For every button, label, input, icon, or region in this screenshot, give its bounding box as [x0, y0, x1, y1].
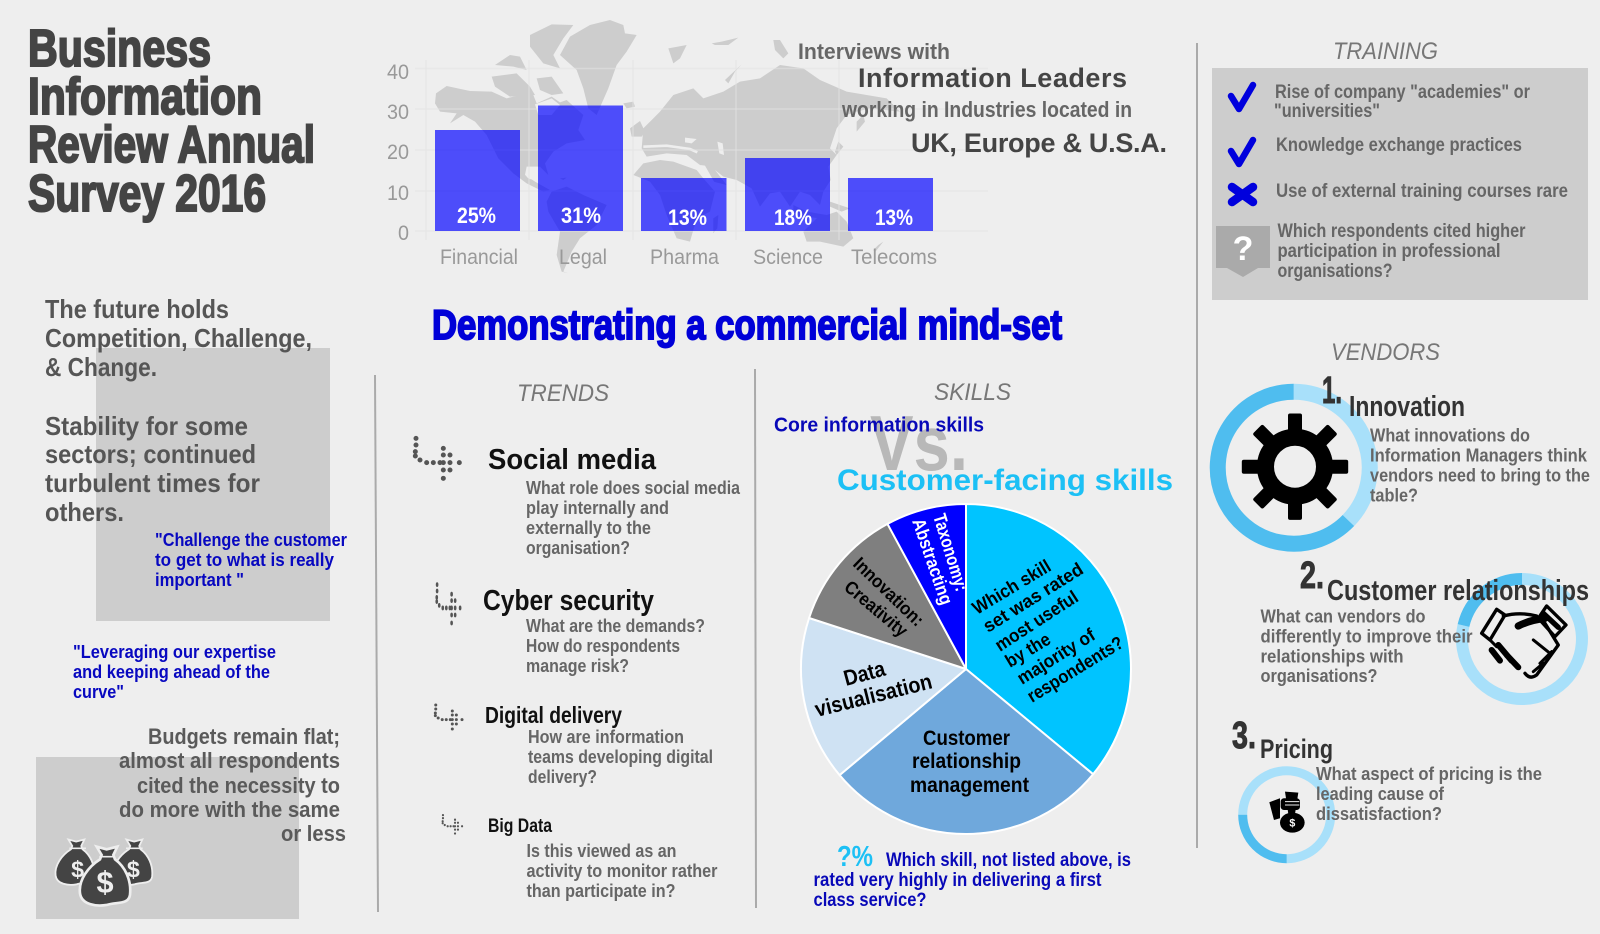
icon: hand with money bag: $	[1289, 818, 1295, 830]
skills question: rated very highly in delivering a first	[814, 870, 1102, 891]
bar values: 25%	[457, 203, 496, 228]
left intro text: others.	[45, 497, 124, 527]
vendor 3: pricing: dissatisfaction?	[1316, 803, 1442, 824]
vendor 1: innovation: 1.	[1322, 370, 1342, 412]
main heading: Demonstrating a commercial mind-set	[432, 301, 1062, 348]
left intro text	[45, 294, 312, 527]
trend: cyber security: Cyber security	[483, 585, 654, 617]
trend: big data: Big Data	[488, 816, 552, 837]
vs watermark: Vs.	[870, 399, 968, 487]
pie label: customer relationship management: relationship	[912, 750, 1021, 773]
training item 1: "universities"	[1274, 101, 1380, 122]
quote: challenge the customer: to get to what is really	[155, 549, 335, 570]
interviews text: Interviews with	[798, 39, 950, 64]
trend: social media: play internally and	[526, 497, 669, 518]
vendor 3: pricing	[1232, 715, 1542, 859]
training item 2: Knowledge exchange practices	[1276, 135, 1522, 156]
world map background	[435, 20, 900, 273]
trend: social media: What role does social media	[526, 477, 741, 498]
quote: challenge the customer	[155, 529, 347, 590]
icon: question bubble: ?	[1233, 230, 1253, 268]
y axis labels: 0	[398, 222, 409, 245]
pie label: innovation: Creativity	[840, 576, 913, 641]
quote: leveraging our expertise	[73, 641, 276, 702]
category labels: Science	[753, 246, 823, 269]
title: Survey 2016	[28, 165, 266, 223]
icon: handshake	[1482, 606, 1566, 677]
trend: cyber security	[437, 585, 705, 676]
vendors heading: VENDORS	[1331, 339, 1440, 366]
trend: social media: organisation?	[526, 537, 630, 558]
y axis labels: 20	[387, 141, 409, 164]
left intro text: & Change.	[45, 352, 157, 382]
icon: hand with money bag	[1269, 792, 1305, 833]
training question: organisations?	[1278, 261, 1392, 282]
category labels: Financial	[440, 246, 518, 269]
vendor 1: innovation	[1218, 370, 1590, 544]
pie label: innovation: Innovation:	[849, 553, 929, 630]
pie question label: by the	[1001, 628, 1054, 671]
skills question: class service?	[814, 890, 926, 911]
trend: social media: externally to the	[526, 517, 651, 538]
icon: dotted arrow small	[437, 585, 460, 623]
budgets text: or less	[281, 821, 346, 846]
y axis labels: 10	[387, 182, 409, 205]
icon: check second	[1231, 140, 1253, 164]
skills question: Which skill, not listed above, is	[886, 850, 1131, 871]
category labels	[440, 246, 937, 269]
trend: big data: Is this viewed as an	[526, 840, 676, 861]
vendor 2: customer relationships: 2.	[1300, 555, 1324, 597]
trend: digital delivery: Digital delivery	[485, 702, 622, 728]
pie label: data visualisation: Data	[841, 656, 889, 691]
vendor 2: customer relationships: differently to improve their	[1260, 626, 1472, 646]
icon: dotted arrow smaller	[435, 705, 462, 729]
left intro text: The future holds	[45, 294, 229, 324]
panel: training	[1212, 68, 1588, 300]
vendor 2: customer relationships: organisations?	[1260, 665, 1378, 686]
pie label: taxonomy: Abstracting	[908, 515, 957, 607]
vendor 1: innovation: table?	[1370, 484, 1418, 506]
budgets text: Budgets remain flat;	[148, 724, 340, 749]
icon: money bags	[55, 840, 152, 906]
budgets text: cited the necessity to	[137, 773, 340, 798]
quote: leveraging our expertise: curve"	[73, 681, 124, 702]
left intro text: turbulent times for	[45, 468, 260, 498]
training question: Which respondents cited higher	[1278, 221, 1526, 242]
training heading: TRAINING	[1333, 38, 1438, 65]
quote: leveraging our expertise: "Leveraging our expertise	[73, 641, 276, 662]
pie label: customer relationship management: Customer	[923, 727, 1010, 750]
skills heading: SKILLS	[934, 379, 1011, 406]
ring gauge	[1218, 392, 1370, 544]
y axis labels: 30	[387, 101, 409, 124]
left grey panel	[96, 348, 330, 621]
training question	[1278, 221, 1526, 282]
budget grey panel	[36, 757, 299, 919]
vendor 3: pricing: What aspect of pricing is the	[1316, 763, 1542, 784]
category labels: Pharma	[650, 246, 719, 269]
icon: question bubble	[1216, 226, 1270, 277]
pie question label: majority of	[1013, 624, 1099, 688]
pie question label: set was rated	[979, 558, 1087, 636]
icon: check	[1231, 85, 1253, 109]
vendor 1: innovation: Innovation	[1349, 391, 1465, 423]
quote: challenge the customer: "Challenge the customer	[155, 529, 347, 550]
pie label: customer relationship management	[910, 727, 1029, 797]
training item 3: Use of external training courses rare	[1276, 181, 1568, 202]
category labels: Telecoms	[851, 246, 937, 269]
title	[28, 20, 315, 223]
category labels: Legal	[559, 246, 607, 269]
training item 1	[1274, 82, 1531, 122]
pie label: taxonomy: Taxonomy:	[929, 511, 973, 594]
pie question label	[968, 555, 1127, 706]
skills question	[814, 841, 1131, 911]
left intro text: sectors; continued	[45, 439, 256, 469]
training item 1: Rise of company "academies" or	[1275, 82, 1531, 103]
vendor 1: innovation: What innovations do	[1370, 424, 1530, 446]
ring gauge	[1462, 579, 1582, 699]
trend: cyber security: What are the demands?	[526, 615, 705, 636]
trend: social media: Social media	[488, 444, 657, 476]
bar values: 31%	[561, 203, 601, 228]
vendor 3: pricing: leading cause of	[1316, 783, 1445, 804]
budgets text: do more with the same	[119, 797, 340, 822]
icon: money bags: $	[127, 856, 140, 882]
icon: dotted arrow smallest	[443, 815, 462, 833]
pie chart	[801, 504, 1131, 834]
trend: digital delivery: teams developing digital	[528, 746, 713, 767]
vendor 2: customer relationships: What can vendors do	[1260, 606, 1426, 626]
trend: social media	[415, 438, 741, 558]
pie question label: respondents?	[1023, 632, 1127, 706]
budgets text	[119, 724, 346, 846]
pie question label: Which skill	[968, 555, 1054, 618]
icon: dotted arrow	[415, 438, 459, 478]
customer-facing skills: Customer-facing skills	[837, 464, 1173, 497]
trend: big data: than participate in?	[526, 880, 676, 901]
y axis labels: 40	[387, 61, 409, 84]
trend: cyber security: How do respondents	[526, 635, 680, 656]
icon: money bags: $	[71, 856, 84, 882]
core information skills: Core information skills	[774, 414, 984, 436]
vendor 3: pricing: Pricing	[1260, 734, 1333, 764]
title: Information	[28, 68, 262, 126]
bar values: 13%	[668, 205, 707, 230]
bars	[435, 106, 933, 231]
interviews text: working in Industries located in	[841, 97, 1132, 122]
skills question: ?%	[837, 841, 873, 873]
title: Business	[28, 20, 211, 78]
icon: cross	[1232, 187, 1253, 202]
vendor 3: pricing: 3.	[1232, 715, 1256, 757]
trends heading: TRENDS	[517, 380, 609, 407]
left intro text: Competition, Challenge,	[45, 323, 312, 353]
trend: digital delivery: delivery?	[528, 766, 597, 787]
interviews text	[798, 39, 1167, 158]
quote: leveraging our expertise: and keeping ahead of the	[73, 661, 270, 682]
bar values	[457, 203, 913, 230]
vendor 2: customer relationships	[1260, 555, 1589, 699]
icon: gear	[1242, 414, 1348, 520]
ring gauge	[1243, 771, 1331, 859]
training question: participation in professional	[1278, 241, 1500, 262]
trend: big data	[443, 815, 718, 901]
bar values: 13%	[875, 205, 913, 230]
bar values: 18%	[774, 205, 812, 230]
interviews text: UK, Europe & U.S.A.	[911, 128, 1167, 158]
trend: cyber security: manage risk?	[526, 655, 629, 676]
interviews text: Information Leaders	[858, 63, 1127, 93]
y axis labels	[387, 61, 409, 245]
pie question label: most useful	[991, 586, 1082, 655]
icon: money bags: $	[96, 866, 114, 900]
pie label: data visualisation: visualisation	[812, 669, 935, 722]
budgets text: almost all respondents	[119, 748, 340, 773]
trend: digital delivery: How are information	[528, 726, 684, 747]
title: Review Annual	[28, 116, 315, 174]
left intro text: Stability for some	[45, 411, 248, 441]
trend: digital delivery	[435, 702, 713, 787]
trend: big data: activity to monitor rather	[526, 860, 718, 881]
vendor 2: customer relationships: relationships with	[1260, 646, 1404, 666]
bar chart	[387, 60, 988, 269]
pie label: customer relationship management: management	[910, 774, 1029, 797]
quote: challenge the customer: important "	[155, 569, 244, 590]
